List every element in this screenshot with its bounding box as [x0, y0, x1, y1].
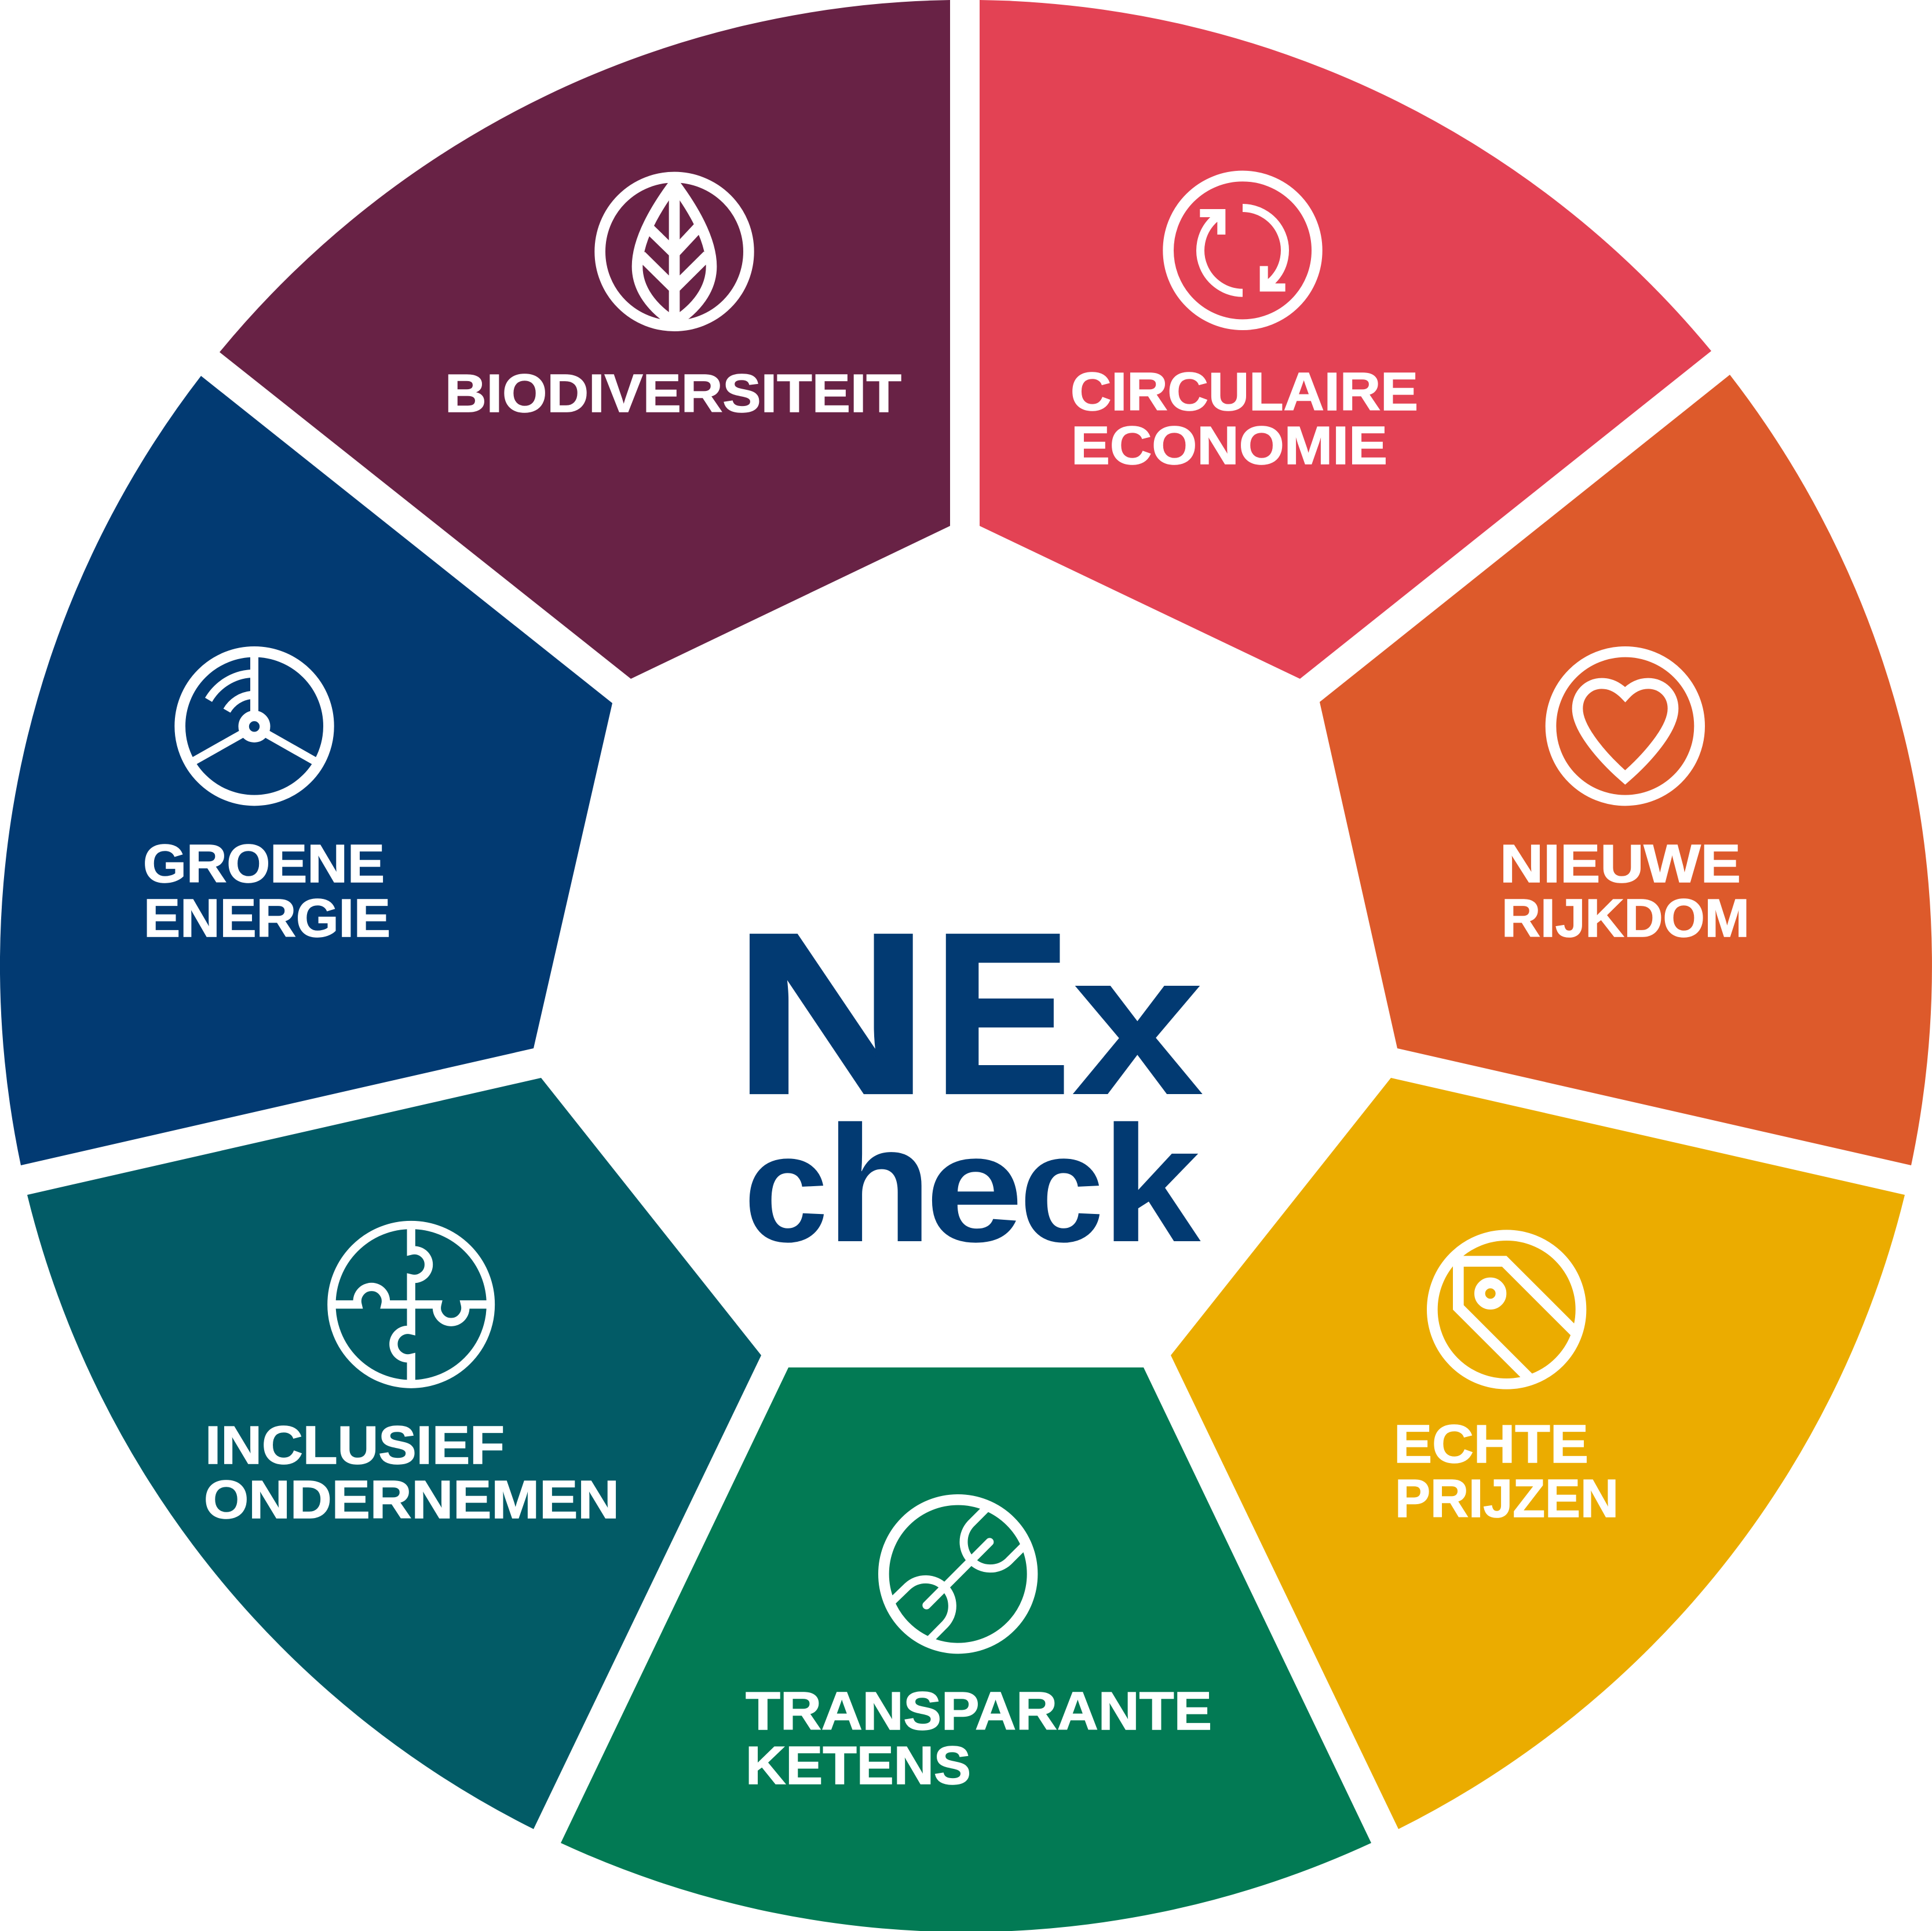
label: circulaire economie [1071, 361, 1418, 476]
label: groene energie: GROENE [143, 833, 385, 894]
title line: check [744, 1091, 1201, 1277]
icon: wind turbine wheel [180, 652, 328, 800]
segment: nieuwe rijkdom [1320, 375, 1932, 1165]
segment: biodiversiteit [220, 0, 950, 679]
icon: chain links [883, 1500, 1032, 1648]
title line: NEx [733, 886, 1206, 1141]
label: transparante ketens: TRANSPARANTE [746, 1681, 1212, 1741]
label: transparante ketens [746, 1681, 1212, 1795]
label: inclusief ondernemen: INCLUSIEF [205, 1415, 505, 1475]
title: NEx check [733, 886, 1206, 1277]
label: circulaire economie: ECONOMIE [1071, 415, 1387, 476]
title line: check: k [1101, 1091, 1201, 1277]
title line: NEx: E [934, 887, 1070, 1141]
panel: circulaire economie [980, 0, 1711, 679]
label: nieuwe rijkdom: NIEUWE [1500, 833, 1741, 894]
icon: leaf [600, 177, 748, 326]
panel: nieuwe rijkdom [1320, 375, 1932, 1165]
label: inclusief ondernemen [204, 1415, 619, 1530]
label: transparante ketens: KETENS [746, 1735, 971, 1795]
title line: check: e [925, 1102, 1024, 1274]
panel: groene energie [0, 376, 612, 1165]
segment: transparante ketens [561, 1367, 1371, 1931]
label: groene energie [143, 833, 390, 948]
label: groene energie: ENERGIE [144, 888, 390, 948]
title line: NEx: x [1071, 909, 1206, 1138]
title line: check: h [826, 1092, 932, 1277]
title line: NEx: N [733, 886, 929, 1141]
icon: circular arrows [1168, 176, 1317, 325]
panel: inclusief ondernemen [27, 1078, 761, 1829]
panel: echte prijzen [1171, 1078, 1905, 1829]
segment: echte prijzen [1171, 1078, 1905, 1829]
label: inclusief ondernemen: ONDERNEMEN [204, 1469, 619, 1530]
label: echte prijzen: ECHTE [1394, 1414, 1588, 1474]
title line: check: c [1020, 1102, 1104, 1274]
icon: price tag [1432, 1235, 1581, 1384]
segment: inclusief ondernemen [27, 1078, 761, 1829]
title line: check: c [744, 1102, 828, 1274]
label: echte prijzen [1394, 1414, 1619, 1528]
segment: circulaire economie [980, 0, 1711, 679]
icon: puzzle [331, 1225, 491, 1384]
label: echte prijzen: PRIJZEN [1395, 1468, 1619, 1528]
icon: heart [1551, 652, 1700, 800]
segment: groene energie [0, 376, 612, 1165]
panel: transparante ketens [561, 1367, 1371, 1931]
label: circulaire economie: CIRCULAIRE [1071, 361, 1418, 422]
label: nieuwe rijkdom: RIJKDOM [1502, 888, 1750, 948]
label: nieuwe rijkdom [1500, 833, 1750, 948]
label: biodiversiteit: BIODIVERSITEIT [445, 363, 901, 423]
panel: biodiversiteit [220, 0, 950, 679]
